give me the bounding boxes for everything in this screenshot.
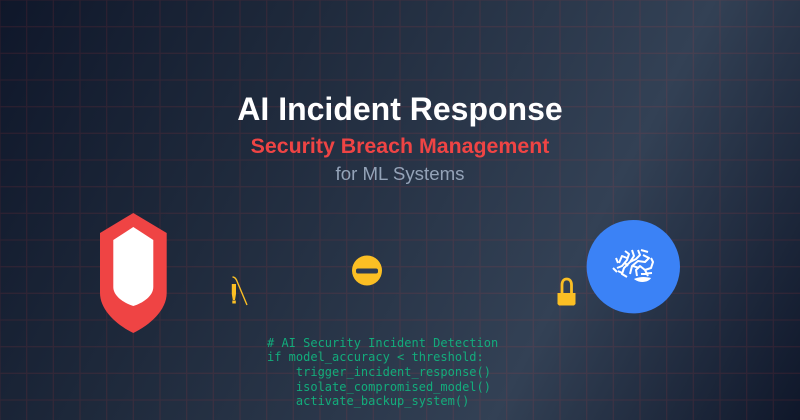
code block: # AI Security Incident Detection if model_accuracy < threshold: trigger_incident_response() isolate_compromised_model() activate_backup_system() [267, 336, 498, 408]
title: AI Incident Response [237, 91, 563, 127]
subtitle: Security Breach Management [251, 134, 549, 158]
tagline: for ML Systems [336, 162, 464, 184]
